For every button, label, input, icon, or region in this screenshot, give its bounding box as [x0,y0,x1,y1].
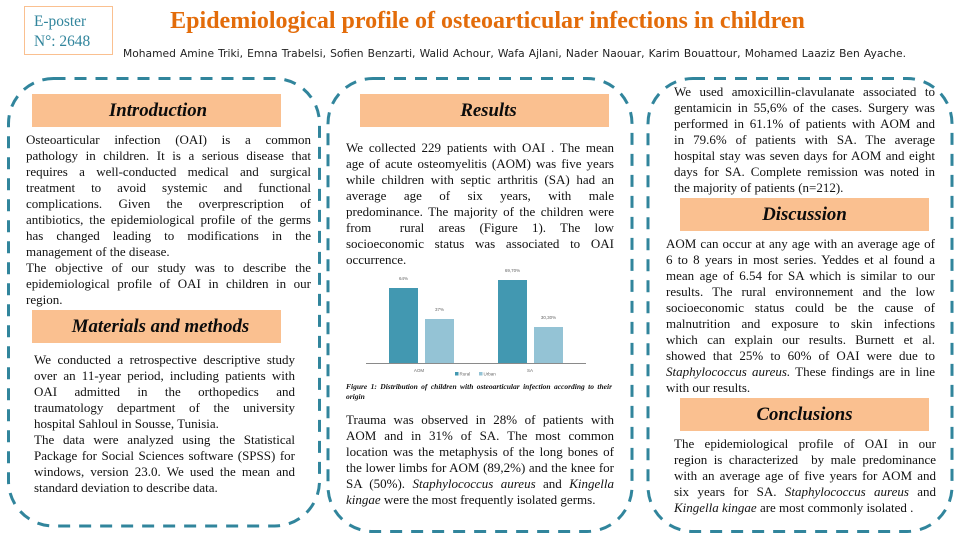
text: results intro [346,140,614,267]
text: materials and methods: traumatology department of the university [34,400,295,415]
text: results continued: location was the metaphysis of the long bones of [346,444,614,459]
text: materials and methods: Package for Social Sciences software (SPSS) for [34,448,295,463]
bar chart: distribution by origin: AOM [414,368,424,373]
text: materials and methods: over an 11-year period, including patients with [34,368,295,383]
heading: Results: Results [460,100,517,121]
text: materials and methods: windows, version 23.0. We used the mean and [34,464,295,479]
text: introduction: complications. Given the overprescription of [26,196,311,211]
bar chart: distribution by origin: 37% [435,307,444,312]
text: results intro: from rural areas (Figure 1). The low [346,220,614,235]
title: Epidemiological profile of osteoarticular infections in children [170,8,805,34]
figure caption: Figure 1: Distribution of children with osteoarticular infection according to their [346,382,612,391]
text: discussion: which can explain our results. Burnett et al. [666,332,935,347]
text: results intro: predominance. The majority of the children were [346,204,614,219]
text: discussion [666,236,935,395]
text: introduction: pathology in children. It is a serious disease that [26,148,311,163]
text: introduction [26,132,311,307]
text: treatment: in 79.6% of patients with SA. The average [674,132,935,147]
text: discussion: AOM can occur at any age with an average age of [666,236,935,251]
text: discussion: socioeconomic status could be the cause of [666,300,935,315]
figure caption: origin [346,392,365,401]
text: materials and methods: OAI admitted in the orthopedics and [34,384,295,399]
e-poster number box: E-poster [34,13,86,30]
bar chart: distribution by origin: Rural [460,372,470,376]
heading: Materials and methods [32,310,281,343]
text: treatment: gentamicin in 55,6% of the cases. Surgery was [674,100,935,115]
heading: Results [360,94,609,127]
text: conclusions: Kingella kingae are most commonly isolated . [674,500,913,515]
heading: Introduction [32,94,281,127]
text: materials and methods: hospital Sahloul in Sousse, Tunisia. [34,416,219,431]
text: materials and methods: The data were analyzed using the Statistical [34,432,295,447]
text: introduction: treatment to avoid systemic and functional [26,180,311,195]
text: conclusions: The epidemiological profile of OAI in our [674,436,936,451]
text: results intro: age of acute osteomyelitis (AOM) was five years [346,156,614,171]
text: results intro: while children with septic arthritis (SA) had an [346,172,614,187]
text: results continued: kingae were the most frequently isolated germs. [346,492,595,507]
text: results continued: Trauma was observed in 28% of patients with [346,412,614,427]
figure caption [346,382,612,401]
text: conclusions: region is characterized by male predominance [674,452,936,467]
text: results continued: AOM and in 31% of SA. The most common [346,428,614,443]
e-poster number box: N°: 2648 [34,32,90,50]
e-poster number box [24,6,113,55]
heading: Discussion: Discussion [762,204,847,225]
text: introduction: has changed leading to modifications in the [26,228,311,243]
text: materials and methods [34,352,295,495]
text: results intro: socioeconomic status was associated to OAI [346,236,614,251]
bar chart: distribution by origin [366,268,586,376]
text: introduction: management of the disease. [26,244,170,259]
bar chart: distribution by origin: 64% [399,276,408,281]
authors: Mohamed Amine Triki, Emna Trabelsi, Sofien Benzarti, Walid Achour, Wafa Ajlani, Nader Naouar, Karim Bouattour, Mohamed Laaziz Ben Ayache. [123,47,906,60]
text: treatment: hospital stay was seven days for AOM and eight [674,148,935,163]
heading: Conclusions: Conclusions [756,404,853,425]
text: results intro: occurrence. [346,252,406,267]
text: results continued: SA (50%). Staphylococcus aureus and Kingella [346,476,614,491]
text: materials and methods: We conducted a retrospective descriptive study [34,352,295,367]
text: materials and methods: standard deviation to describe data. [34,480,218,495]
text: introduction: antibiotics, the epidemiological profile of the germs [26,212,311,227]
text: introduction: Osteoarticular infection (OAI) is a common [26,132,311,147]
text: introduction: requires a well-conducted medical and surgical [26,164,311,179]
text: results intro: We collected 229 patients with OAI . The mean [346,140,614,155]
heading: Introduction: Introduction [109,100,207,121]
text: treatment: We used amoxicillin-clavulanate associated to [674,84,935,99]
text: discussion: showed that 25% to 60% of OAI were due to [666,348,935,363]
text: discussion: Staphylococcus aureus. These findings are in line [666,364,935,379]
text: introduction: The objective of our study was to describe the [26,260,311,275]
text: conclusions: with an average age of five years for AOM and [674,468,936,483]
text: results intro: average age of six years, with male [346,188,614,203]
heading: Materials and methods: Materials and methods [72,316,249,337]
text: discussion: mean age of 6.54 for SA which is similar to our [666,268,935,283]
text: discussion: with our results. [666,380,750,395]
text: discussion: malnutrition and exposure to skin infections [666,316,935,331]
text: results continued [346,412,614,507]
text: discussion: 6 to 8 years in most series. Yeddes et al found a [666,252,935,267]
heading: Discussion [680,198,929,231]
text: treatment: performed in 61.1% of patients with AOM and [674,116,935,131]
heading: Conclusions [680,398,929,431]
text: treatment: the majority of patients (n=212). [674,180,843,195]
text: treatment [674,84,935,195]
bar chart: distribution by origin: 30,30% [541,315,556,320]
bar chart: distribution by origin: SA [527,368,533,373]
text: treatment: days for SA. Complete remission was noted in [674,164,935,179]
bar chart: distribution by origin: 69,70% [505,268,520,273]
text: conclusions: six years for SA. Staphylococcus aureus and [674,484,936,499]
bar chart: distribution by origin: Urban [484,372,496,376]
text: introduction: region. [26,292,62,307]
text: introduction: epidemiological profile of OAI in children in our [26,276,311,291]
text: results continued: the lower limbs for AOM (89,2%) and the knee for [346,460,614,475]
text: discussion: results. The rural environnement and the low [666,284,935,299]
text: conclusions [674,436,936,515]
